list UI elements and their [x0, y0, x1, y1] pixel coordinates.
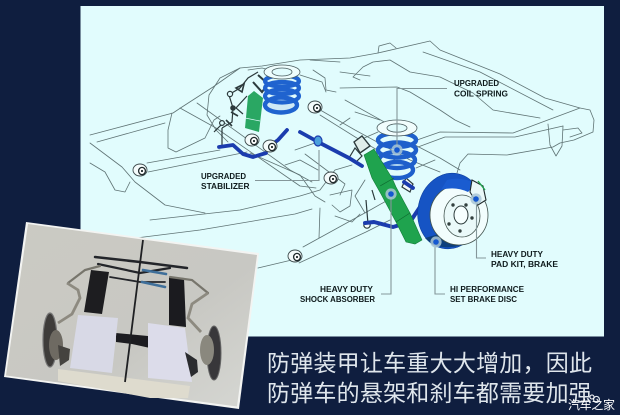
left knuckle and brake disc	[43, 283, 80, 367]
caption text: 防弹车的悬架和刹车都需要加强。	[267, 380, 615, 406]
component: rear coil spring	[377, 120, 417, 178]
label: upgraded stabilizer: STABILIZER	[201, 181, 250, 191]
component: suspension bushings	[133, 101, 338, 262]
label: heavy duty pad kit, brake: PAD KIT, BRAKE	[491, 259, 558, 269]
label: upgraded coil spring	[454, 78, 508, 98]
rear sway bar links	[349, 148, 413, 228]
front suspension linkage	[214, 72, 268, 148]
air shock left	[84, 270, 109, 314]
component: rear shock absorber	[354, 136, 422, 244]
watermark: 汽车之家	[568, 397, 615, 412]
centre pole	[125, 240, 143, 382]
chassis frame outline	[90, 41, 594, 268]
component: brake disc and shield	[411, 167, 489, 255]
label: upgraded coil spring: COIL SPRING	[454, 88, 508, 98]
information sheet right	[148, 323, 192, 382]
label: upgraded stabilizer	[201, 171, 250, 191]
display plinth	[58, 369, 190, 398]
caption text: 防弹装甲让车重大大增加，因此	[267, 350, 592, 376]
label: heavy duty pad kit, brake: HEAVY DUTY	[491, 249, 543, 259]
right knuckle and brake disc	[185, 293, 221, 380]
label: hi performance set brake disc	[450, 284, 524, 304]
caption text	[267, 350, 615, 406]
label: heavy duty pad kit, brake	[491, 249, 558, 269]
component: front shock absorber	[245, 91, 263, 132]
leader lines	[255, 88, 486, 294]
panel: suspension line diagram	[80, 6, 604, 336]
label: upgraded stabilizer: UPGRADED	[201, 171, 246, 181]
component: upgraded stabilizer bar	[219, 130, 420, 227]
air shock right	[169, 277, 186, 327]
label: hi performance set brake disc: SET BRAKE DISC	[450, 294, 517, 304]
component: front coil spring	[264, 65, 300, 112]
photo: real suspension display	[4, 222, 259, 409]
label: heavy duty shock absorber: SHOCK ABSORBER	[300, 294, 376, 304]
crossmember	[116, 333, 150, 348]
information sheet left	[70, 315, 118, 373]
label: heavy duty shock absorber: HEAVY DUTY	[320, 284, 373, 294]
label: hi performance set brake disc: HI PERFORMANCE	[450, 284, 524, 294]
label: upgraded coil spring: UPGRADED	[454, 78, 499, 88]
callout markers	[385, 144, 482, 248]
label: heavy duty shock absorber	[300, 284, 376, 304]
upper control arms	[68, 257, 208, 293]
